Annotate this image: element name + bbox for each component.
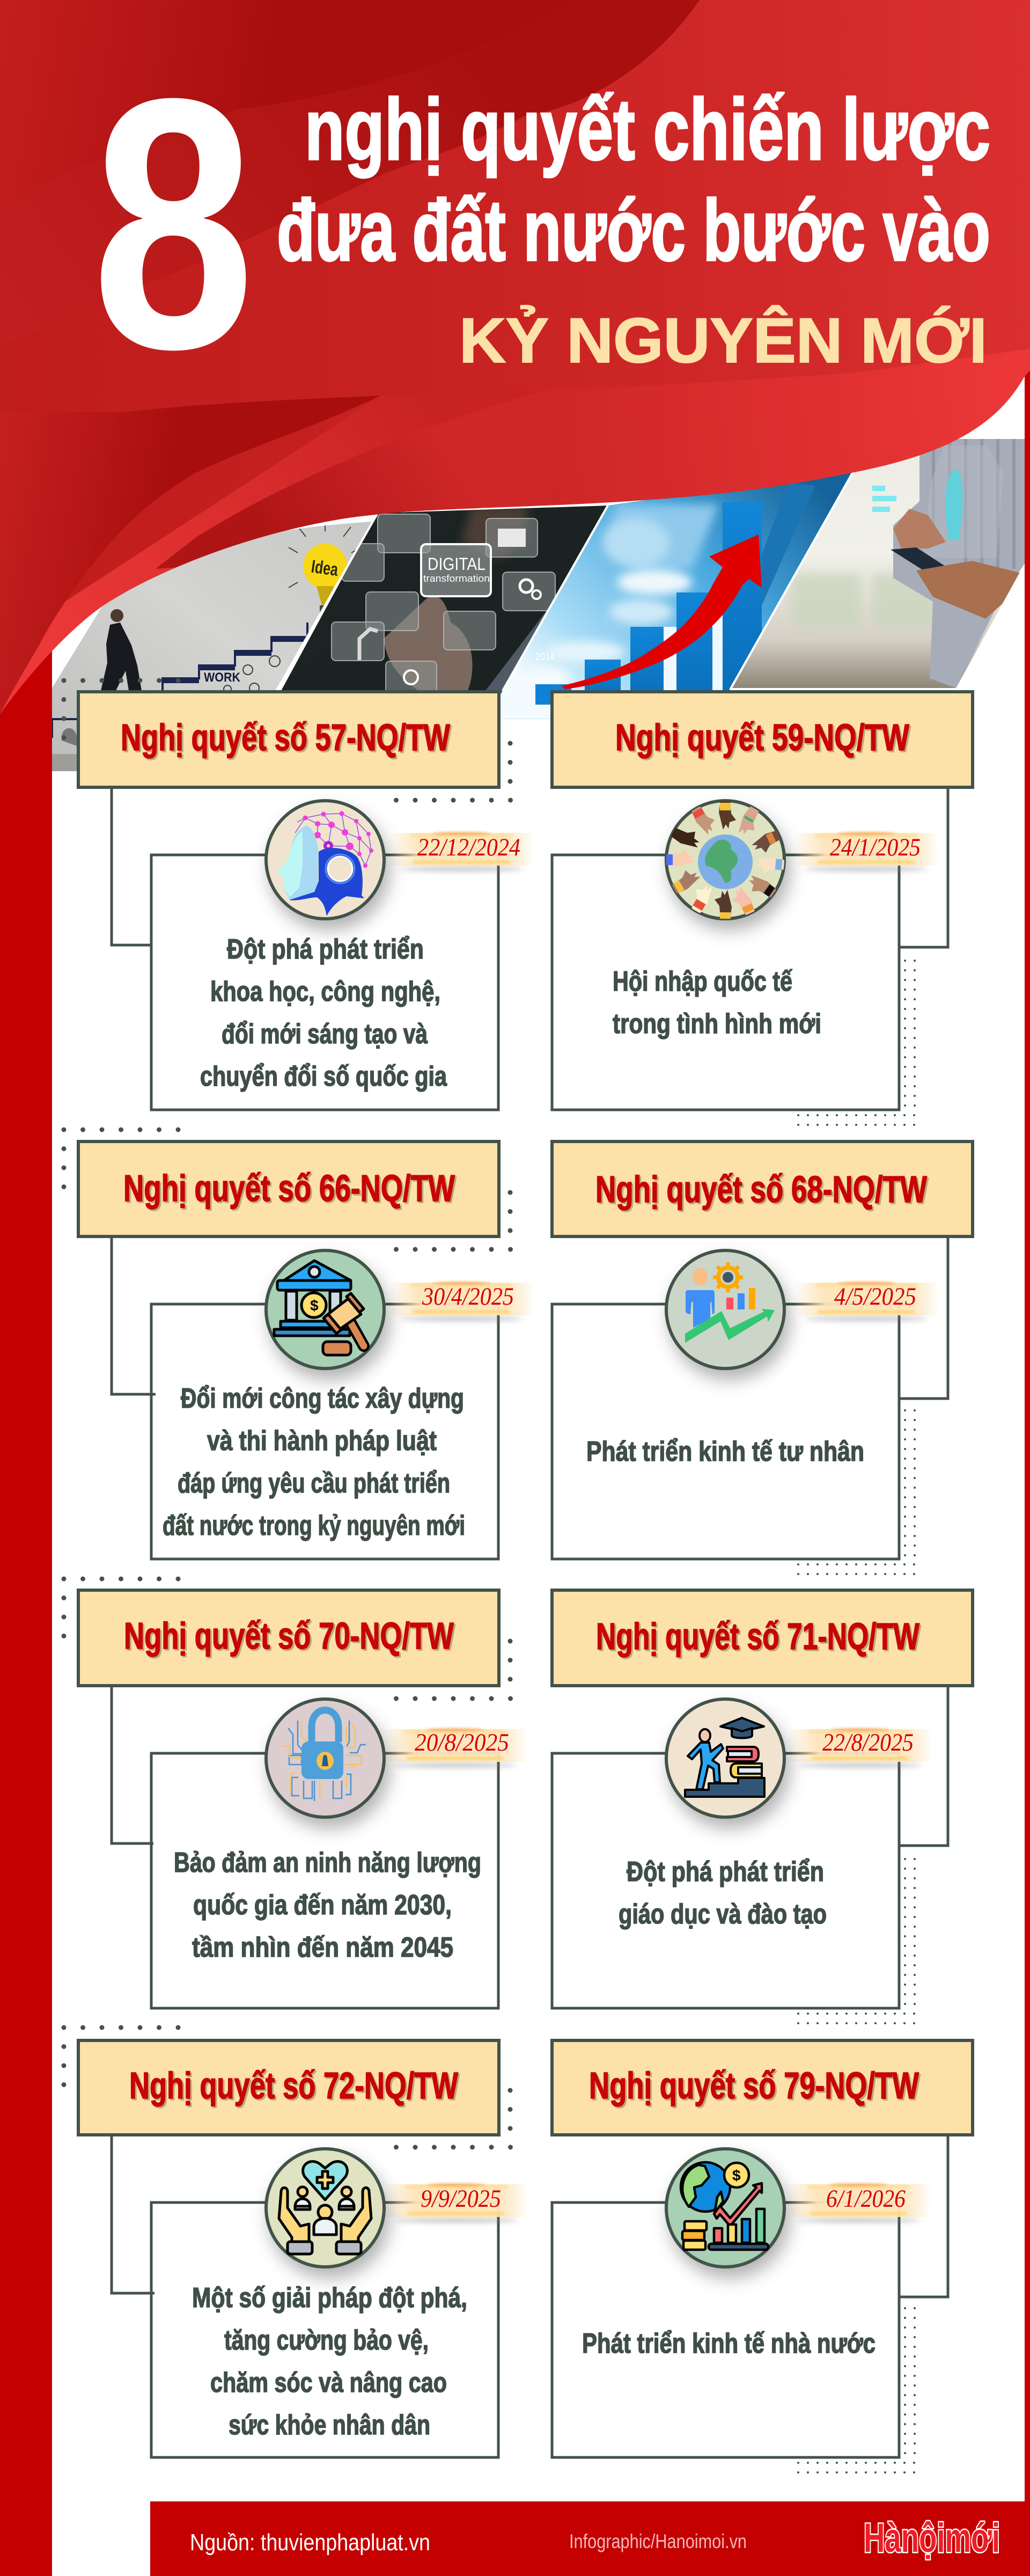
red header banner bbox=[0, 0, 1030, 719]
header bar: Nghị quyết số 57-NQ/TW bbox=[121, 716, 450, 758]
header bar: Nghị quyết số 71-NQ/TW bbox=[596, 1615, 919, 1657]
content box bbox=[151, 855, 498, 1110]
body text: chuyển đổi số quốc gia bbox=[200, 1061, 447, 1092]
body text: đáp ứng yêu cầu phát triển bbox=[178, 1468, 450, 1499]
body text: tăng cường bảo vệ, bbox=[224, 2325, 429, 2356]
left red strip bbox=[0, 590, 52, 2576]
icon: person, gear, bars and green arrow bbox=[666, 1250, 784, 1368]
body text: tầm nhìn đến năm 2045 bbox=[192, 1932, 453, 1963]
credit: Infographic/Hanoimoi.vn bbox=[569, 2530, 747, 2552]
body text: Đột phá phát triển bbox=[627, 1856, 824, 1887]
photo panel: data and rising bar chart: 2014 bbox=[535, 651, 555, 663]
connector bbox=[112, 2136, 154, 2293]
header bar: Nghị quyết số 70-NQ/TW bbox=[124, 1615, 454, 1657]
right red strip bbox=[1025, 353, 1030, 2576]
body text: đất nước trong kỷ nguyên mới bbox=[163, 1510, 465, 1541]
body text bbox=[163, 1383, 465, 1541]
date: 22/8/2025 bbox=[822, 1729, 914, 1757]
content box bbox=[552, 1304, 899, 1559]
date ribbon bbox=[382, 1728, 527, 1768]
body text: trong tình hình mới bbox=[613, 1008, 821, 1040]
content box bbox=[552, 1753, 899, 2008]
photo panel: digital transformation: DIGITAL bbox=[428, 554, 485, 574]
header bar bbox=[552, 1590, 973, 1686]
header bar bbox=[552, 2040, 973, 2135]
photo panel: digital transformation bbox=[231, 504, 617, 784]
header bar bbox=[552, 692, 973, 787]
card: Nghị quyết số 72 bbox=[78, 2040, 528, 2457]
title: big number 8: 8 bbox=[92, 24, 255, 423]
header bar bbox=[78, 692, 499, 787]
body text bbox=[613, 966, 821, 1040]
header bar bbox=[78, 1590, 499, 1686]
photo collage bbox=[52, 439, 1025, 784]
icon: AI head bbox=[266, 801, 384, 919]
date: 22/12/2024 bbox=[417, 833, 520, 861]
date ribbon bbox=[794, 1282, 939, 1321]
icon: bank and gavel bbox=[266, 1250, 384, 1368]
body text: và thi hành pháp luật bbox=[207, 1425, 437, 1457]
connector bbox=[112, 1238, 156, 1394]
card: Nghị quyết số 70 bbox=[78, 1590, 527, 2008]
content box bbox=[552, 2202, 899, 2457]
photo panel: digital transformation: transformation bbox=[423, 573, 490, 584]
body text: sức khỏe nhân dân bbox=[229, 2410, 430, 2441]
body text: Đột phá phát triển bbox=[227, 934, 424, 965]
date: 24/1/2025 bbox=[830, 833, 921, 861]
footer bar bbox=[150, 2501, 1025, 2576]
photo panel: businessman with phone bbox=[730, 439, 1025, 689]
card: Nghị quyết 59 bbox=[552, 692, 973, 1110]
icon: bank and gavel: $ bbox=[310, 1297, 319, 1314]
connector bbox=[899, 2136, 948, 2297]
date ribbon bbox=[389, 832, 534, 872]
photo panel: man climbing stairs to idea bulb bbox=[52, 519, 373, 771]
body text: Một số giải pháp đột phá, bbox=[192, 2282, 467, 2314]
date ribbon bbox=[794, 832, 939, 872]
red rising arrow bbox=[562, 535, 762, 689]
body text: chăm sóc và nâng cao bbox=[210, 2367, 447, 2398]
icon: padlock with circuits bbox=[266, 1699, 384, 1817]
body text bbox=[192, 2282, 467, 2441]
date: 9/9/2025 bbox=[421, 2185, 501, 2213]
date ribbon bbox=[788, 1728, 932, 1768]
photo panel: man climbing stairs to idea bulb: Idea bbox=[310, 557, 340, 580]
header bar: Nghị quyết số 79-NQ/TW bbox=[589, 2065, 919, 2106]
card: Nghị quyết số 79 bbox=[552, 2040, 973, 2457]
date ribbon bbox=[786, 2183, 931, 2223]
header bar: Nghị quyết số 68-NQ/TW bbox=[595, 1168, 927, 1210]
header bar bbox=[78, 2040, 499, 2135]
body text: giáo dục và đào tạo bbox=[619, 1899, 827, 1930]
body text: Hội nhập quốc tế bbox=[613, 966, 792, 997]
icon: caring hands and heart bbox=[266, 2149, 384, 2267]
header bar bbox=[552, 1141, 973, 1236]
photo panel: data and rising bar chart bbox=[483, 467, 858, 724]
icon: globe, coins and growth chart bbox=[666, 2149, 784, 2267]
body text: Phát triển kinh tế tư nhân bbox=[586, 1436, 864, 1467]
body text: đổi mới sáng tạo và bbox=[222, 1019, 428, 1050]
decorative dots bbox=[64, 680, 916, 2472]
content box bbox=[151, 1304, 498, 1559]
body text: Phát triển kinh tế nhà nước bbox=[582, 2328, 876, 2359]
card: Nghị quyết số 71 bbox=[552, 1590, 973, 2008]
icon: climbing to education bbox=[666, 1699, 784, 1817]
content box bbox=[151, 1753, 498, 2008]
body text bbox=[619, 1856, 827, 1930]
card: Nghị quyết số 68 bbox=[552, 1141, 973, 1559]
source: Nguồn: thuvienphapluat.vn bbox=[190, 2529, 430, 2556]
photo panel: man climbing stairs to idea bulb: WORK bbox=[204, 670, 241, 685]
title line 3: KỶ NGUYÊN MỚI bbox=[459, 305, 987, 376]
date: 30/4/2025 bbox=[422, 1283, 514, 1311]
connector bbox=[112, 788, 150, 945]
content box bbox=[151, 2202, 498, 2457]
header bar bbox=[78, 1141, 499, 1236]
body text: khoa học, công nghệ, bbox=[210, 976, 440, 1007]
date: 4/5/2025 bbox=[834, 1283, 916, 1311]
date ribbon bbox=[384, 2183, 528, 2223]
header bar: Nghị quyết 59-NQ/TW bbox=[615, 716, 909, 758]
body text: quốc gia đến năm 2030, bbox=[193, 1890, 452, 1921]
connector bbox=[112, 1687, 153, 1843]
body text: Bảo đảm an ninh năng lượng bbox=[174, 1847, 481, 1878]
connector bbox=[899, 1238, 948, 1399]
date ribbon bbox=[389, 1282, 534, 1321]
content box bbox=[552, 855, 899, 1110]
icon: globe, coins and growth chart: $ bbox=[732, 2167, 741, 2184]
date: 6/1/2026 bbox=[826, 2185, 906, 2213]
date: 20/8/2025 bbox=[415, 1729, 509, 1757]
header bar: Nghị quyết số 66-NQ/TW bbox=[123, 1167, 455, 1209]
body text bbox=[200, 934, 447, 1092]
body text: Đổi mới công tác xây dựng bbox=[181, 1383, 464, 1414]
connector bbox=[899, 1687, 948, 1846]
card: Nghị quyết số 57 bbox=[78, 692, 534, 1110]
connector bbox=[899, 788, 948, 947]
card: Nghị quyết số 66 bbox=[78, 1141, 534, 1559]
header bar: Nghị quyết số 72-NQ/TW bbox=[129, 2065, 458, 2106]
icon: hands around globe bbox=[666, 801, 785, 919]
body text bbox=[174, 1847, 481, 1963]
